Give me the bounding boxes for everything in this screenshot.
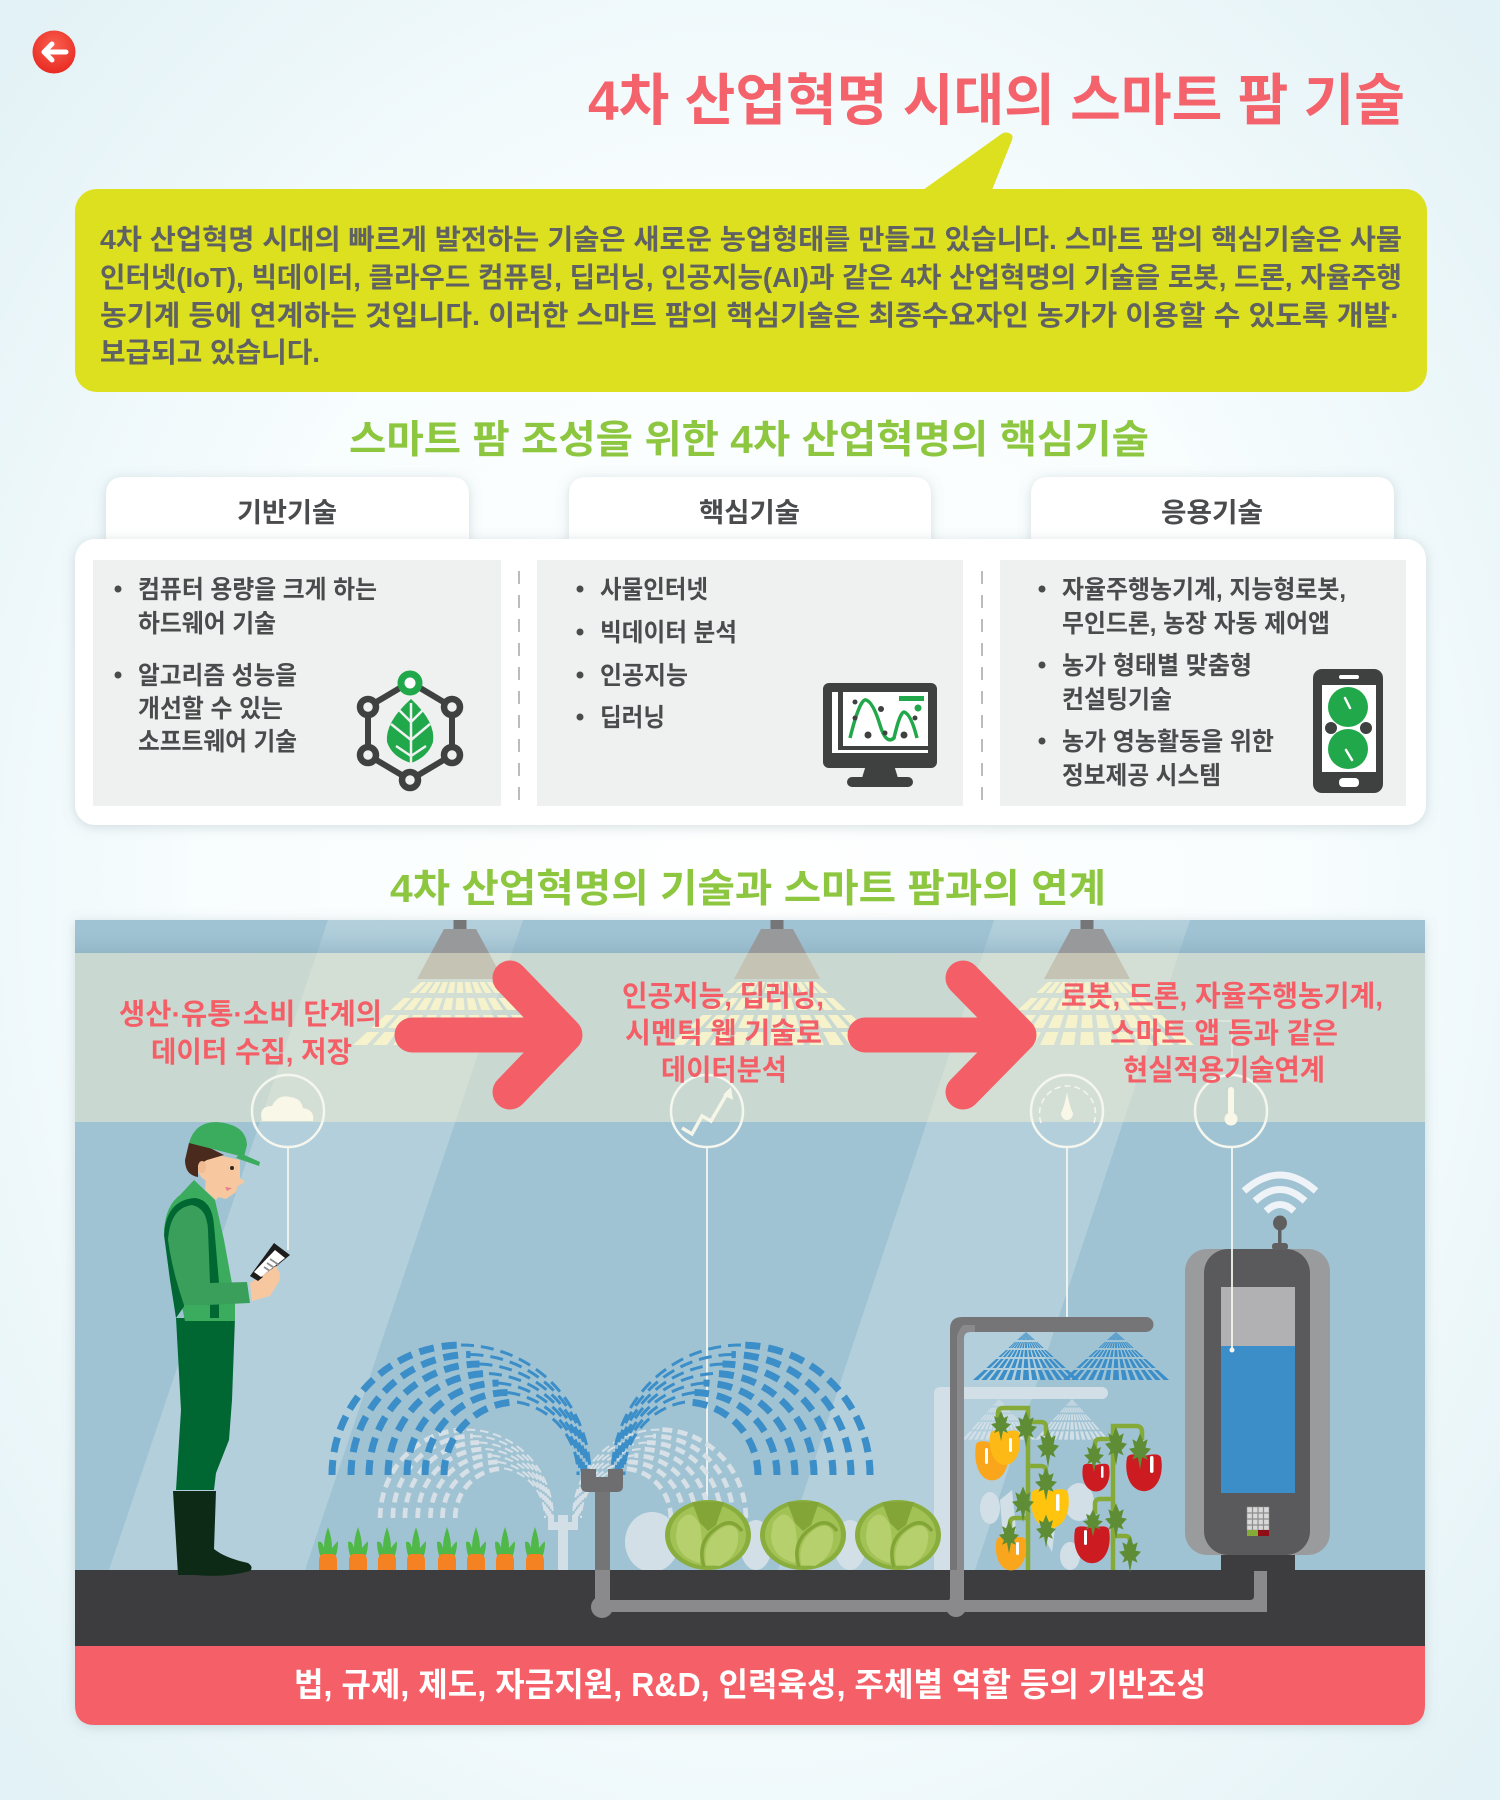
intro text: 4차 산업혁명 시대의 빠르게 발전하는 기술은 새로운 농업형태를 만들고 있습니다. 스마트 팜의 핵심기술은 사물 [100,224,1402,255]
card: core technology: 빅데이터 분석 [600,619,737,647]
card: applied technology: 농가 영농활동을 위한 [1062,728,1274,756]
heading: core technologies: 스마트 팜 조성을 위한 4차 산업혁명의 핵심기술 [349,419,1149,462]
card: core technology [537,560,963,806]
heading: connection with smart farm: 4차 산업혁명의 기술과 스마트 팜과의 연계 [390,868,1106,911]
ceiling shade [75,940,1425,953]
card: applied technology: 자율주행농기계, 지능형로봇, [1062,576,1346,604]
back button [32,30,76,74]
intro text: 보급되고 있습니다. [100,337,320,368]
callout: data collection: 데이터 수집, 저장 [151,1036,352,1069]
card: foundation technology: 알고리즘 성능을 [138,662,297,690]
carrots [318,1527,545,1570]
card: foundation technology [93,560,501,806]
title: 4차 산업혁명 시대의 스마트 팜 기술 [588,69,1405,132]
icon: monitor chart [823,683,937,787]
callout: data analysis: 시멘틱 웹 기술로 [625,1017,822,1050]
callout: data collection: 생산·유통·소비 단계의 [119,998,382,1031]
pepper plants [975,1408,1162,1572]
callout: real-world application [1061,980,1383,1087]
water tank device [1185,1147,1330,1571]
sensor icon: thermometer [1195,1075,1267,1147]
antenna [1272,1216,1288,1250]
tab: 핵심기술 [569,477,931,545]
grow lamps [417,920,1130,979]
farmer [164,1122,290,1576]
ghost water sprays [380,1430,746,1518]
translucent band [75,953,1425,1122]
intro text: 농기계 등에 연계하는 것입니다. 이러한 스마트 팜의 핵심기술은 최종수요자인 농가가 이용할 수 있도록 개발· [100,300,1400,331]
lamp light rays [353,982,1194,1045]
icon: leaf network [360,674,460,788]
irrigation pipes [581,1317,1267,1618]
intro text [100,224,1402,368]
tab: 응용기술: 응용기술 [1161,498,1263,528]
tab: 기반기술: 기반기술 [237,498,337,528]
card: applied technology: 무인드론, 농장 자동 제어앱 [1062,610,1330,638]
card: applied technology: 정보제공 시스템 [1062,762,1221,790]
card: foundation technology: 하드웨어 기술 [138,610,276,638]
card: core technology: 인공지능 [600,662,688,690]
red policy bar: 법, 규제, 제도, 자금지원, R&D, 인력육성, 주체별 역할 등의 기반조성 [294,1666,1206,1703]
blue water sprays [332,1345,870,1475]
divider [518,571,520,802]
callout: data collection [119,998,382,1069]
ghost pipes and plants [548,1387,1108,1572]
callout: data analysis: 데이터분석 [661,1054,787,1087]
red peppers [1074,1454,1162,1563]
tab: 기반기술 [106,477,469,545]
callout: real-world application: 현실적용기술연계 [1123,1054,1325,1087]
callout: data analysis [622,980,824,1087]
card: core technology: 딥러닝 [600,704,665,732]
smartphone in hand [250,1243,290,1301]
keypad [1247,1507,1269,1536]
divider [981,571,983,802]
intro text: 인터넷(IoT), 빅데이터, 클라우드 컴퓨팅, 딥러닝, 인공지능(AI)과 같은 4차 산업혁명의 기술을 로봇, 드론, 자율주행 [100,262,1402,293]
tab: 핵심기술: 핵심기술 [699,498,800,528]
sensor icon: growth chart [671,1075,743,1147]
light beams [109,920,1190,1570]
card: foundation technology: 개선할 수 있는 [138,695,283,723]
connector lines [288,1021,1232,1516]
card: foundation technology: 컴퓨터 용량을 크게 하는 [138,576,377,604]
yellow peppers [975,1430,1069,1570]
sensor icon: gauge [1031,1075,1103,1147]
white card [75,539,1426,825]
red policy bar [75,1646,1425,1725]
panel: intro speech bubble [75,132,1427,392]
tab: 응용기술 [1031,477,1394,545]
sensor icon: cloud [252,1075,324,1147]
card: foundation technology: 소프트웨어 기술 [138,728,297,756]
pepper leaves [991,1411,1151,1572]
panel: smart farm scene [75,920,1425,1725]
ground [75,1570,1425,1646]
card: applied technology: 농가 형태별 맞춤형 [1062,652,1252,680]
wifi signal [1244,1175,1316,1211]
callout: real-world application: 로봇, 드론, 자율주행농기계, [1061,980,1383,1013]
cabbages [665,1500,941,1570]
blue sprinkler fans [973,1332,1169,1380]
panel: technology tabs and cards [75,477,1426,825]
callout: data analysis: 인공지능, 딥러닝, [622,980,824,1013]
arrow: first to second stage [412,978,565,1092]
card: core technology: 사물인터넷 [600,576,708,604]
ghost fans [962,1399,1109,1440]
icon: smartphone gauges [1313,669,1383,793]
arrow: second to third stage [865,978,1019,1092]
card: applied technology [1000,560,1406,806]
card: applied technology: 컨설팅기술 [1062,686,1172,714]
callout: real-world application: 스마트 앱 등과 같은 [1110,1017,1338,1050]
scene background [75,920,1425,1580]
